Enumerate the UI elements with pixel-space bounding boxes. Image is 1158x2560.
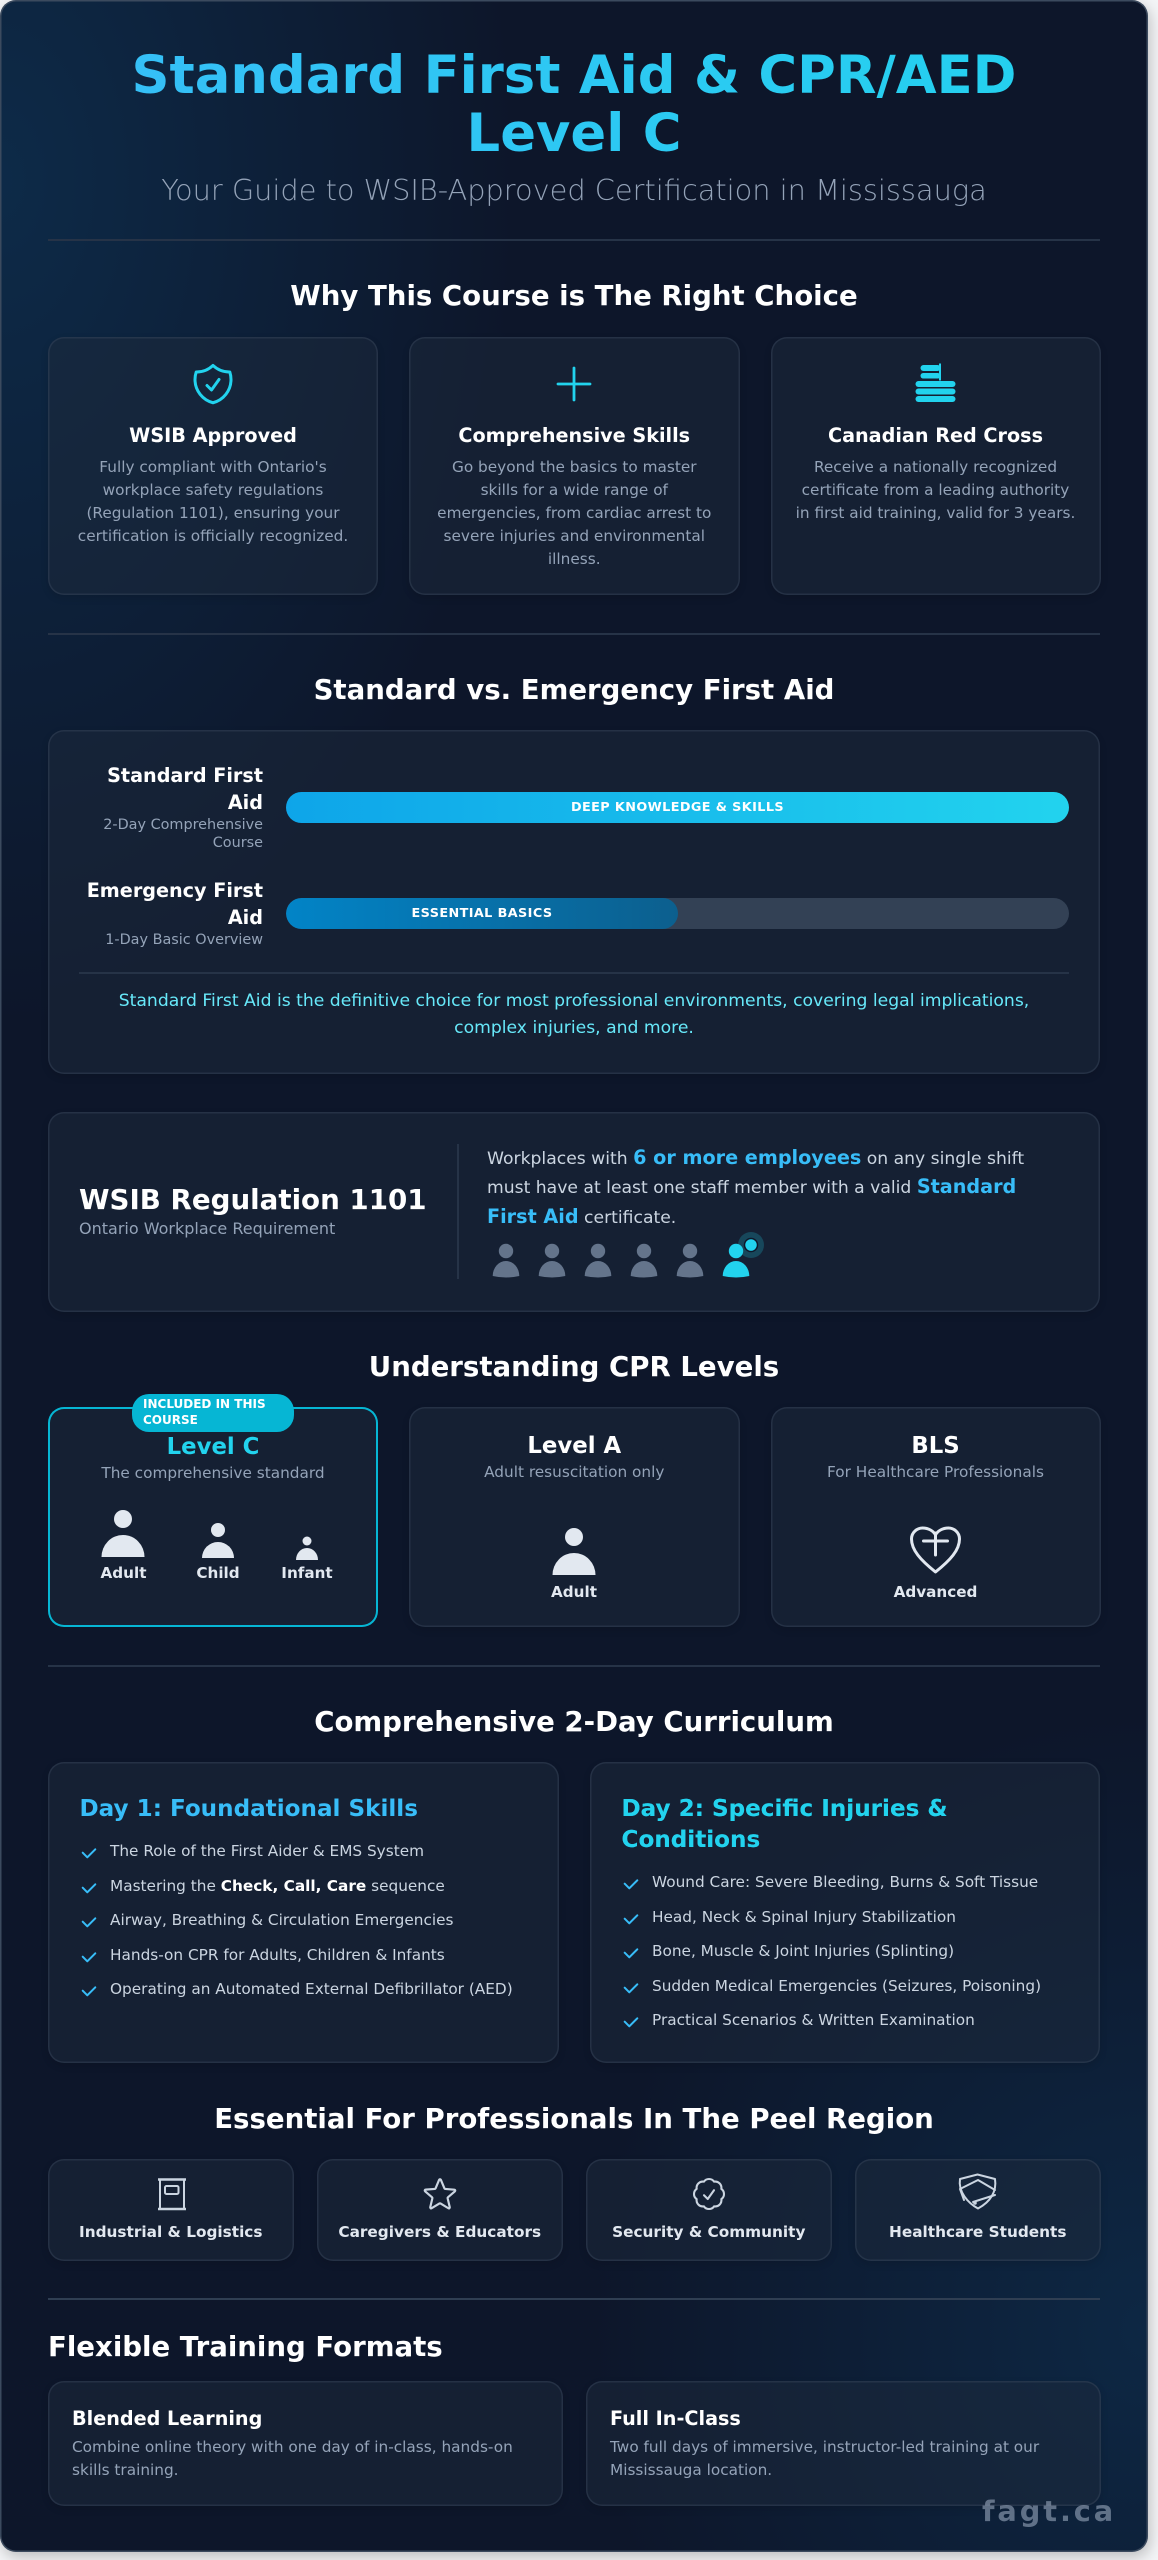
badge: included in this course: INCLUDED IN THIS — [143, 1397, 266, 1411]
label: adult: Adult — [551, 1583, 597, 1601]
card title: WSIB Approved — [129, 424, 297, 447]
item: The Role of the First Aider & EMS System — [110, 1842, 424, 1860]
format title: Blended Learning — [72, 2406, 262, 2430]
day title: Day 1: Foundational Skills — [80, 1796, 418, 1822]
card title: Canadian Red Cross — [828, 424, 1043, 447]
panel: level C — [48, 1407, 378, 1627]
item: Hands-on CPR for Adults, Children & Infants — [110, 1946, 445, 1964]
sublabel: 1-Day Basic Overview — [105, 932, 263, 948]
callout note — [119, 991, 1029, 1038]
item: Airway, Breathing & Circulation Emergencies — [110, 1911, 454, 1929]
check — [82, 1848, 96, 1858]
check — [624, 1983, 638, 1994]
check — [624, 1948, 638, 1958]
item: Mastering the Check, Call, Care sequence — [110, 1876, 445, 1894]
panel: canadian red cross — [770, 337, 1100, 595]
icon: adult — [552, 1528, 596, 1575]
item: Bone, Muscle & Joint Injuries (Splinting) — [652, 1942, 954, 1960]
card text — [78, 458, 348, 545]
card text: emergencies, from cardiac arrest to — [437, 504, 711, 522]
format text: Two full days of immersive, instructor-led training at our — [610, 2438, 1039, 2456]
format text: Combine online theory with one day of in-class, hands-on — [72, 2438, 513, 2456]
card text: certificate from a leading authority — [802, 481, 1069, 499]
icon: adult child infant — [102, 1510, 318, 1560]
bar: standard — [286, 792, 1069, 823]
card text — [437, 458, 711, 568]
card title: Comprehensive Skills — [458, 424, 690, 447]
card text: Receive a nationally recognized — [814, 458, 1057, 476]
icon: check badge — [693, 2178, 725, 2210]
label: Caregivers & Educators — [338, 2223, 541, 2241]
regulation text — [487, 1146, 1024, 1228]
card text: Fully compliant with Ontario's — [99, 458, 327, 476]
level subtitle: Adult resuscitation only — [484, 1463, 664, 1481]
regulation text: must have at least one staff member with a valid Standard — [487, 1175, 1016, 1198]
bar: standard: DEEP KNOWLEDGE & SKILLS — [571, 800, 784, 815]
panel: blended learning — [48, 2381, 562, 2506]
title: Level C — [467, 102, 681, 164]
label: Healthcare Students — [889, 2223, 1066, 2241]
label: standard first aid — [107, 764, 263, 814]
item: Head, Neck & Spinal Injury Stabilization — [652, 1908, 956, 1926]
card text: certification is officially recognized. — [78, 527, 348, 545]
card text: (Regulation 1101), ensuring your — [86, 504, 340, 522]
heading: standard vs emergency: Standard vs. Emergency First Aid — [314, 672, 834, 706]
level title: Level C — [167, 1434, 259, 1460]
panel: comprehensive skills — [409, 337, 740, 595]
bar: emergency — [286, 898, 1069, 929]
label: emergency first aid: Aid — [228, 906, 263, 928]
icon: door — [158, 2178, 186, 2210]
item: Wound Care: Severe Bleeding, Burns & Soft Tissue — [652, 1873, 1038, 1891]
callout note: complex injuries, and more. — [454, 1018, 694, 1038]
label: Security & Community — [612, 2223, 805, 2241]
label: emergency first aid — [87, 878, 263, 928]
icon: stacked certificates — [916, 364, 956, 402]
item: Practical Scenarios & Written Examination — [652, 2011, 975, 2029]
icon: six employees — [492, 1232, 764, 1278]
regulation text: Workplaces with 6 or more employees on any single shift — [487, 1146, 1024, 1169]
panel: day 1 — [48, 1762, 558, 2062]
level subtitle: The comprehensive standard — [101, 1464, 325, 1482]
day title: Day 2: Specific Injuries & — [622, 1796, 948, 1822]
card text: workplace safety regulations — [103, 481, 323, 499]
card text: in first aid training, valid for 3 years. — [796, 504, 1075, 522]
format title: Full In-Class — [610, 2406, 741, 2430]
item: Operating an Automated External Defibrillator (AED) — [110, 1980, 513, 1998]
day title: Conditions — [622, 1826, 760, 1852]
label: child: Child — [196, 1564, 240, 1582]
check — [624, 1879, 638, 1890]
check — [624, 1914, 638, 1924]
day title — [622, 1794, 948, 1855]
bar fill: ESSENTIAL BASICS — [412, 906, 552, 921]
icon: heart with cross — [910, 1526, 961, 1574]
label: Industrial & Logistics — [79, 2223, 262, 2241]
bar fill — [286, 898, 678, 929]
title: Standard First Aid & CPR/AED — [131, 45, 1017, 106]
label: advanced: Advanced — [894, 1583, 977, 1601]
check — [82, 1883, 96, 1894]
panel: full in-class — [586, 2381, 1100, 2506]
label: standard first aid: Aid — [228, 790, 263, 814]
icon: shield check — [194, 364, 232, 404]
format text: skills training. — [72, 2460, 179, 2478]
card text: severe injuries and environmental — [444, 527, 705, 545]
panel: security — [586, 2159, 832, 2260]
panel: WSIB approved — [48, 337, 378, 595]
card text: skills for a wide range of — [481, 481, 668, 499]
callout note: Standard First Aid is the definitive choice for most professional environments, covering legal implications, — [119, 991, 1029, 1011]
check — [624, 2017, 638, 2028]
level title: BLS — [911, 1433, 960, 1459]
panel: caregivers — [317, 2159, 562, 2260]
format text — [610, 2438, 1040, 2478]
heading: curriculum: Comprehensive 2-Day Curriculum — [314, 1704, 834, 1738]
panel: BLS — [770, 1407, 1100, 1627]
panel: comparison — [48, 730, 1100, 1074]
check — [82, 1917, 96, 1928]
regulation subtitle: Ontario Workplace Requirement — [79, 1218, 335, 1238]
panel: industrial — [48, 2159, 294, 2260]
badge: included in this course: COURSE — [143, 1412, 198, 1426]
format text: Mississauga location. — [610, 2460, 772, 2478]
card text — [796, 458, 1075, 522]
card text: illness. — [548, 550, 601, 568]
panel: healthcare students — [855, 2159, 1100, 2260]
label: standard first aid: Standard First — [107, 764, 263, 786]
watermark: fagt.ca — [982, 2494, 1116, 2528]
sublabel: 2-Day Comprehensive — [103, 816, 263, 832]
heading: flexible formats: Flexible Training Formats — [48, 2330, 443, 2362]
regulation text: First Aid certificate. — [487, 1205, 676, 1228]
heading: CPR levels: Understanding CPR Levels — [369, 1350, 779, 1382]
level subtitle: For Healthcare Professionals — [827, 1463, 1044, 1481]
check — [82, 1952, 96, 1962]
panel: WSIB regulation — [48, 1112, 1100, 1312]
panel: level A — [409, 1407, 740, 1627]
level title: Level A — [527, 1433, 621, 1459]
heading: professionals: Essential For Professionals In The Peel Region — [214, 2102, 934, 2134]
sublabel: Course — [213, 835, 263, 851]
item: Sudden Medical Emergencies (Seizures, Poisoning) — [652, 1976, 1041, 1994]
icon: plus — [556, 366, 592, 402]
sublabel — [103, 816, 263, 851]
format text — [72, 2438, 513, 2478]
regulation title: WSIB Regulation 1101 — [79, 1183, 426, 1216]
icon: shield — [958, 2174, 996, 2210]
label: adult: Adult — [101, 1564, 146, 1582]
panel: day 2 — [590, 1762, 1100, 2062]
subtitle: Your Guide to WSIB-Approved Certification in Mississauga — [161, 173, 987, 207]
card text: Go beyond the basics to master — [452, 458, 697, 476]
icon: star — [424, 2178, 456, 2210]
label: infant: Infant — [281, 1564, 333, 1582]
label: emergency first aid: Emergency First — [87, 878, 263, 902]
title — [0, 47, 1148, 162]
check — [82, 1986, 96, 1996]
heading: why this course: Why This Course is The Right Choice — [290, 278, 858, 312]
badge: included in this course — [132, 1394, 294, 1432]
